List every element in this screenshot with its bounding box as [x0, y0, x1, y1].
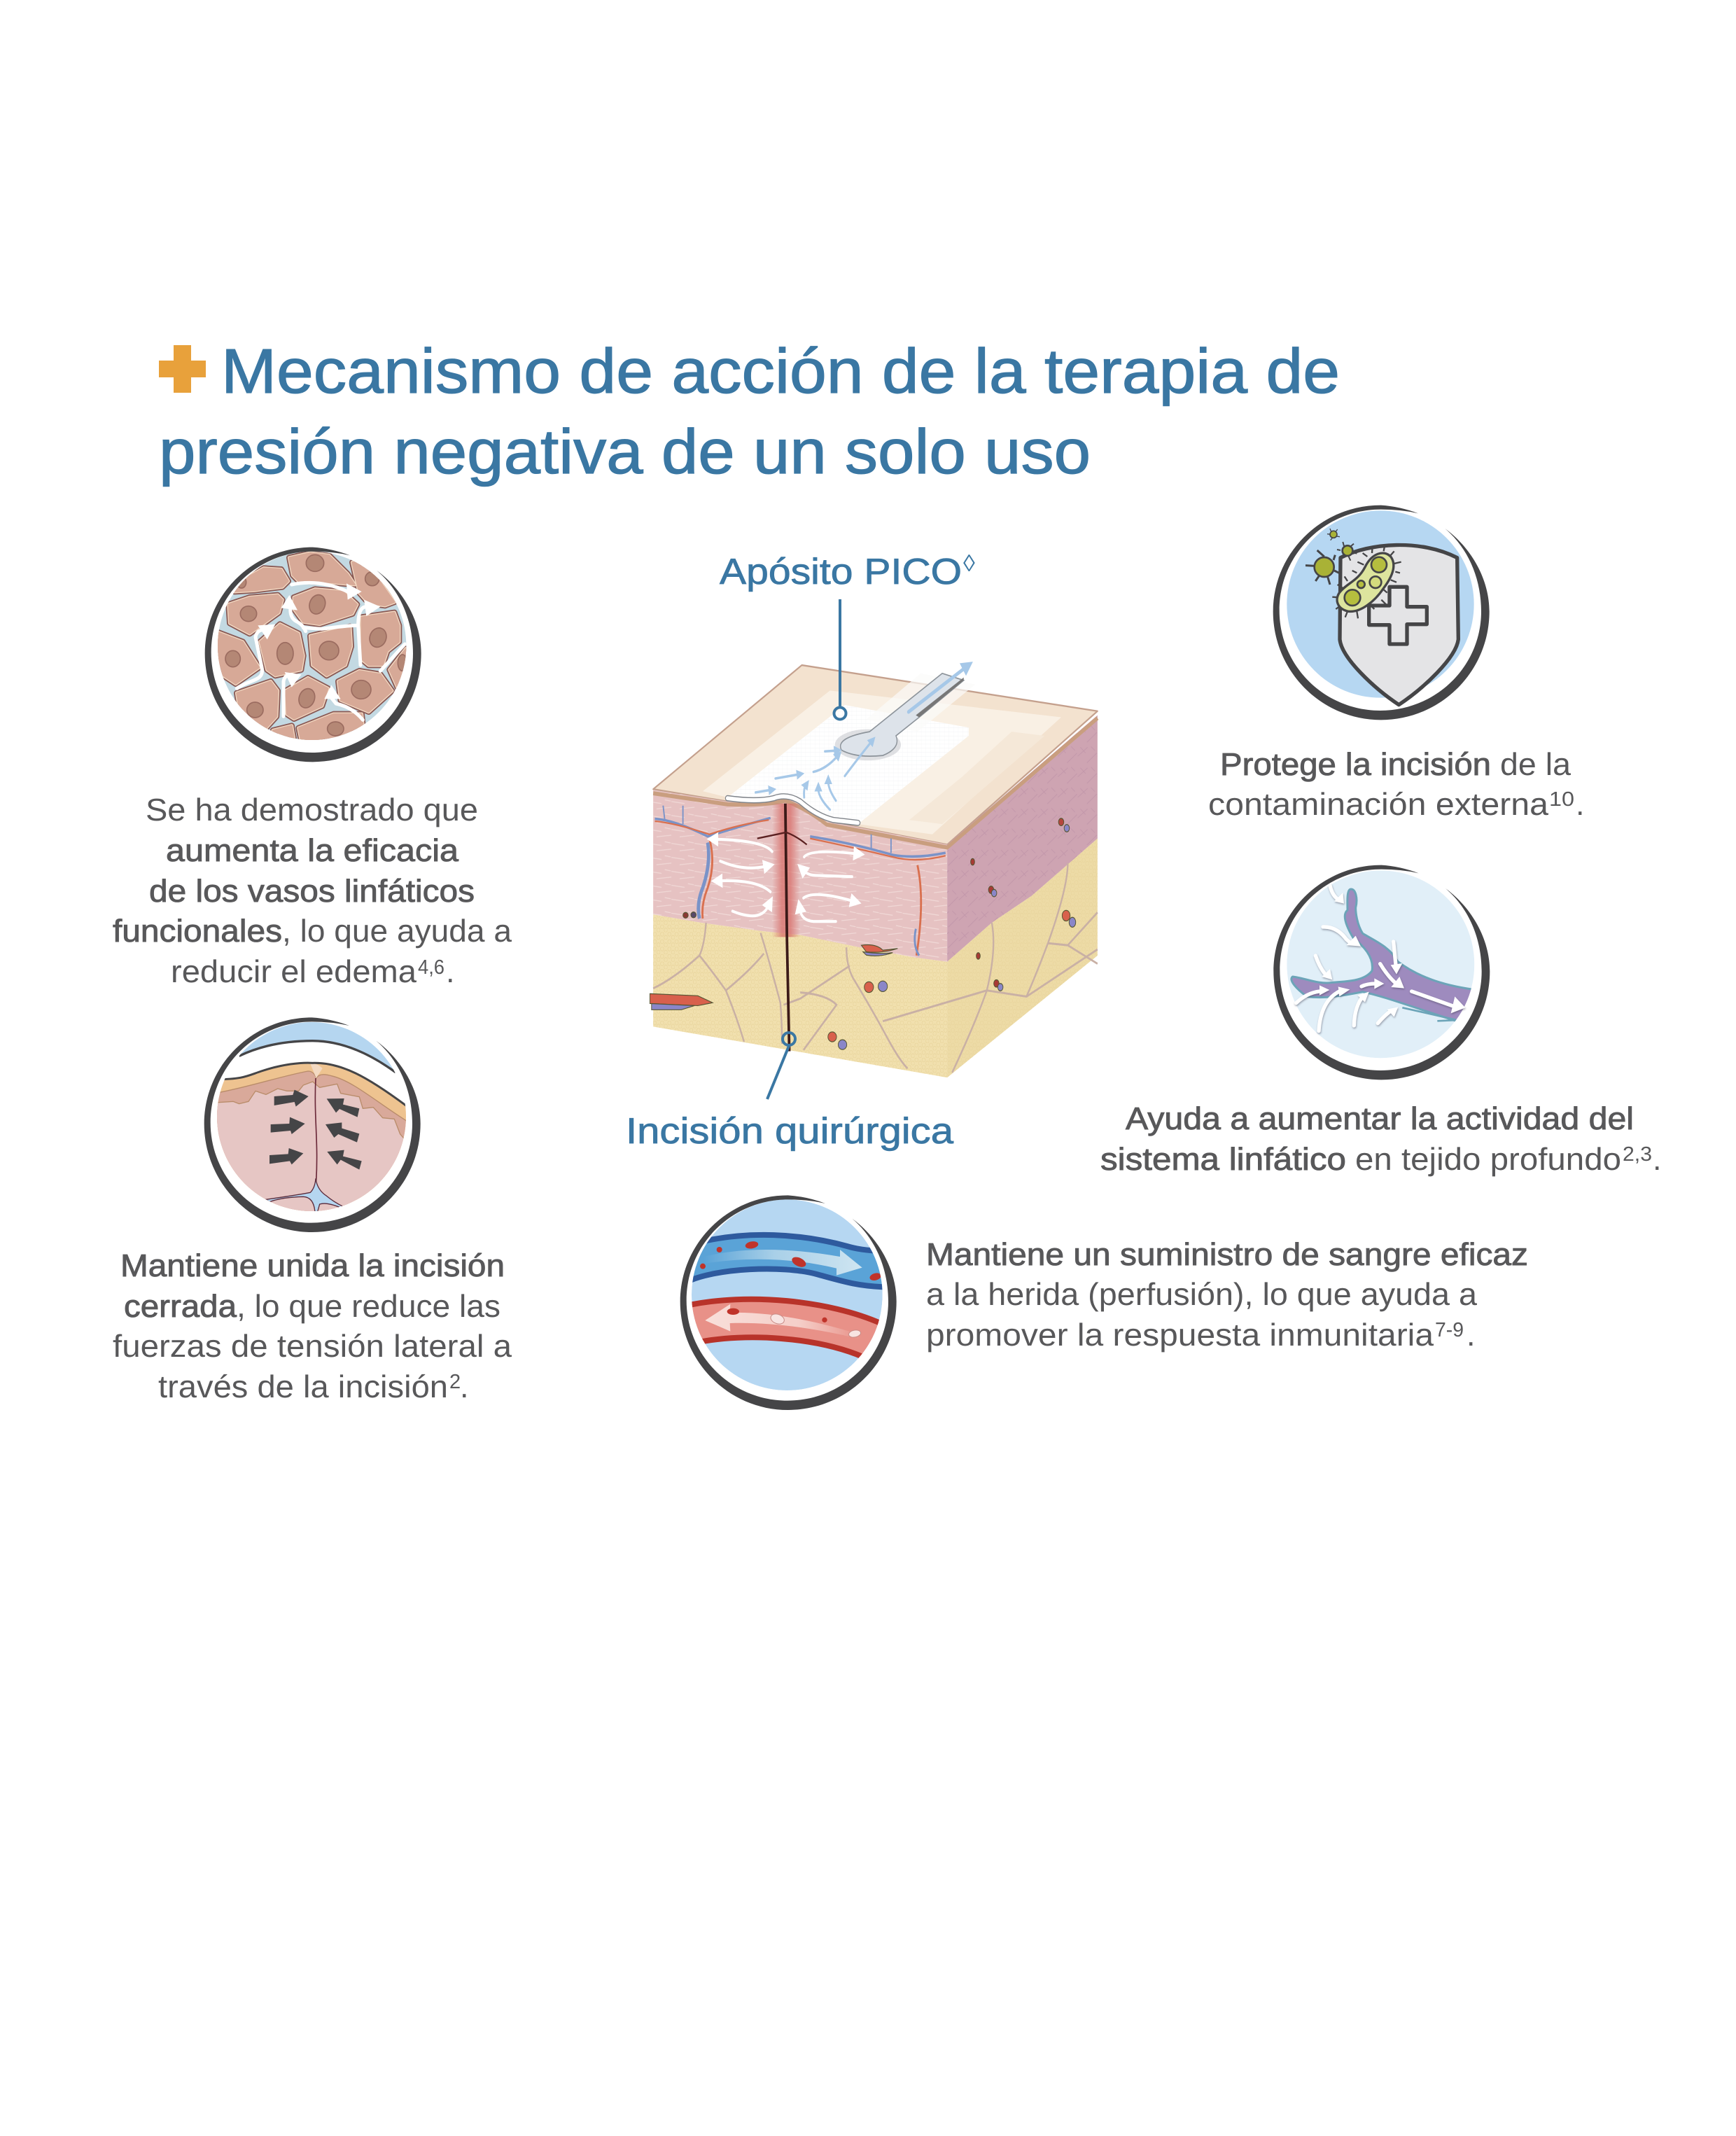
blue flow arrows on dressing [755, 668, 965, 810]
label: PICO dressing: ◊ [963, 550, 975, 577]
text: lymphatic vessels: 4,6 [418, 956, 444, 979]
vessel cross-sections [650, 818, 1076, 1049]
dermis side face [947, 716, 1098, 962]
text: protect incision: 10 [1549, 788, 1574, 811]
text: blood supply: . [1466, 1317, 1476, 1353]
label: surgical incision: Incisión quirúrgica [626, 1111, 953, 1152]
text: lymphatic activity: sistema linfático [1100, 1141, 1346, 1177]
text: lymphatic vessels: , lo que ayuda a [282, 913, 512, 949]
blood vessels [655, 806, 946, 956]
text: protect incision: de la [1500, 746, 1572, 782]
illustration: skin block with dressing [650, 665, 1098, 1077]
text: closed incision: Mantiene unida la incisión [120, 1248, 505, 1283]
text: lymphatic activity: Ayuda a aumentar la actividad del [1126, 1101, 1634, 1136]
icon: closed incision circle [204, 1015, 421, 1232]
text: lymphatic activity: 2,3 [1623, 1143, 1652, 1166]
text: protect incision: Protege la incisión [1220, 746, 1491, 782]
text: closed incision: 2 [449, 1371, 461, 1393]
text: lymphatic vessels: funcionales [113, 913, 282, 949]
text: lymphatic vessels: . [446, 954, 455, 989]
fat front face [653, 914, 947, 1077]
fat side face [947, 839, 1098, 1077]
text: closed incision [113, 1248, 512, 1404]
text: lymphatic vessels [113, 792, 512, 989]
text: closed incision: fuerzas de tensión lateral a [113, 1328, 512, 1364]
incision [757, 804, 807, 1052]
text: blood supply: 7-9 [1435, 1319, 1464, 1341]
label: PICO dressing: Apósito PICO [720, 552, 962, 592]
text: lymphatic vessels: reducir el edema [171, 954, 417, 989]
title: presión negativa de un solo uso [159, 417, 1091, 487]
callout: incision pointer [767, 1033, 795, 1099]
top face [653, 665, 1098, 844]
icon: epithelial cells circle [205, 546, 421, 762]
dressing port and tube [835, 673, 975, 760]
text: blood supply [926, 1236, 1528, 1353]
dermis front face [653, 790, 947, 962]
dressing pad [727, 705, 969, 824]
text: lymphatic vessels: aumenta la eficacia [166, 832, 459, 868]
title [159, 337, 1340, 487]
icon: orange plus [159, 345, 206, 393]
text: blood supply: promover la respuesta inmunitaria [926, 1317, 1434, 1353]
text: lymphatic vessels: de los vasos linfáticos [149, 873, 475, 909]
text: closed incision: través de la incisión [158, 1369, 448, 1404]
text: closed incision: . [460, 1369, 469, 1404]
callout: dressing pointer [834, 599, 846, 720]
text: protect incision: contaminación externa [1208, 786, 1549, 822]
icon: blood vessels circle [680, 1195, 897, 1410]
connective tissue lines [653, 863, 1098, 1073]
text: closed incision: , lo que reduce las [237, 1288, 500, 1324]
text: lymphatic activity [1100, 1101, 1662, 1177]
text: lymphatic activity: en tejido profundo [1355, 1141, 1621, 1177]
text: blood supply: a la herida (perfusión), lo que ayuda a [926, 1276, 1478, 1312]
icon: shield and bacteria circle [1273, 505, 1490, 720]
text: lymphatic vessels: Se ha demostrado que [146, 792, 478, 828]
text: closed incision: cerrada [124, 1288, 237, 1324]
text: blood supply: Mantiene un suministro de sangre eficaz [926, 1236, 1528, 1272]
text: protect incision [1208, 746, 1585, 822]
white flow arrows in tissue [716, 839, 855, 921]
title: Mecanismo de acción de la terapia de [221, 337, 1340, 407]
icon: lymphatic system circle [1273, 865, 1490, 1080]
text: lymphatic activity: . [1653, 1141, 1662, 1177]
text: protect incision: . [1576, 786, 1585, 822]
